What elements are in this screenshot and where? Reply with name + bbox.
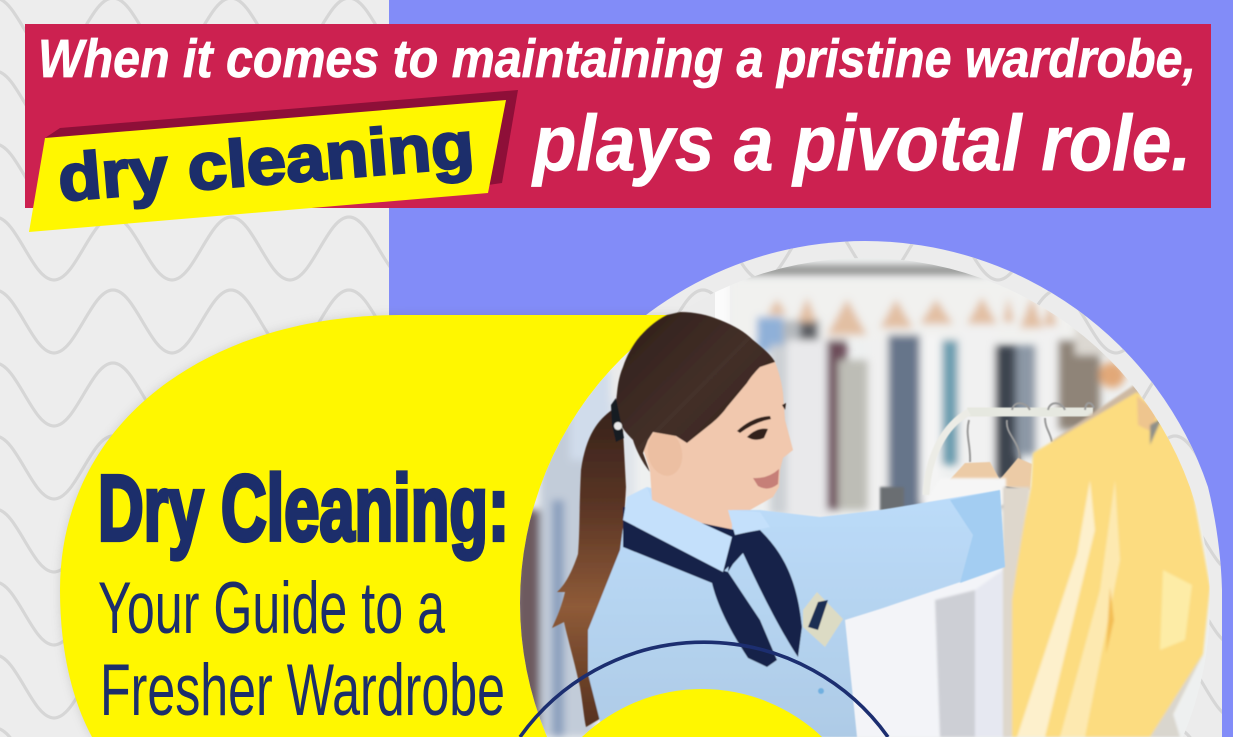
collar [623, 487, 732, 572]
yellow title shape shadow [60, 315, 700, 737]
hair [616, 312, 775, 472]
garments on rail [757, 317, 783, 352]
photo ring [503, 241, 1222, 737]
eye and brow [737, 403, 786, 440]
tag shadow [45, 90, 518, 185]
white garments in plastic [878, 476, 1008, 737]
background: grey wave panel [0, 0, 389, 737]
background: periwinkle panel [389, 0, 1233, 737]
shirt button [818, 688, 824, 694]
white column [715, 286, 728, 322]
sleeve fold [950, 490, 1005, 583]
hair tie [611, 398, 624, 442]
shirt body and arm [588, 487, 1005, 737]
hanger tops [767, 297, 1057, 335]
neck and face [640, 340, 793, 537]
yellow title shape [60, 315, 700, 737]
right collar [728, 510, 770, 535]
navy arc [520, 642, 888, 737]
subtitle line one: Your Guide to a [98, 568, 445, 649]
blurred bagged garments at left [515, 510, 545, 737]
smile [753, 469, 779, 489]
yellow garment [1003, 383, 1210, 737]
scarf [623, 507, 802, 667]
photo: dry cleaner attendant checking garments [515, 255, 1215, 737]
name badge [803, 592, 843, 647]
header banner [25, 24, 1211, 232]
attendant figure [552, 312, 1005, 737]
tag text: dry cleaning: dry cleaning [55, 107, 477, 215]
yellow lower circle [582, 689, 822, 737]
photo backdrop and blurred clothes rack [515, 255, 1215, 737]
title: Dry Cleaning: Dry Cleaning: [98, 456, 509, 560]
header red panel [25, 24, 1211, 208]
rail and hangers [926, 403, 1094, 495]
ear [644, 427, 686, 479]
subtitle line two: Fresher Wardrobe [100, 650, 505, 731]
title block [98, 456, 509, 731]
ponytail [552, 410, 626, 727]
yellow tag [29, 100, 506, 232]
